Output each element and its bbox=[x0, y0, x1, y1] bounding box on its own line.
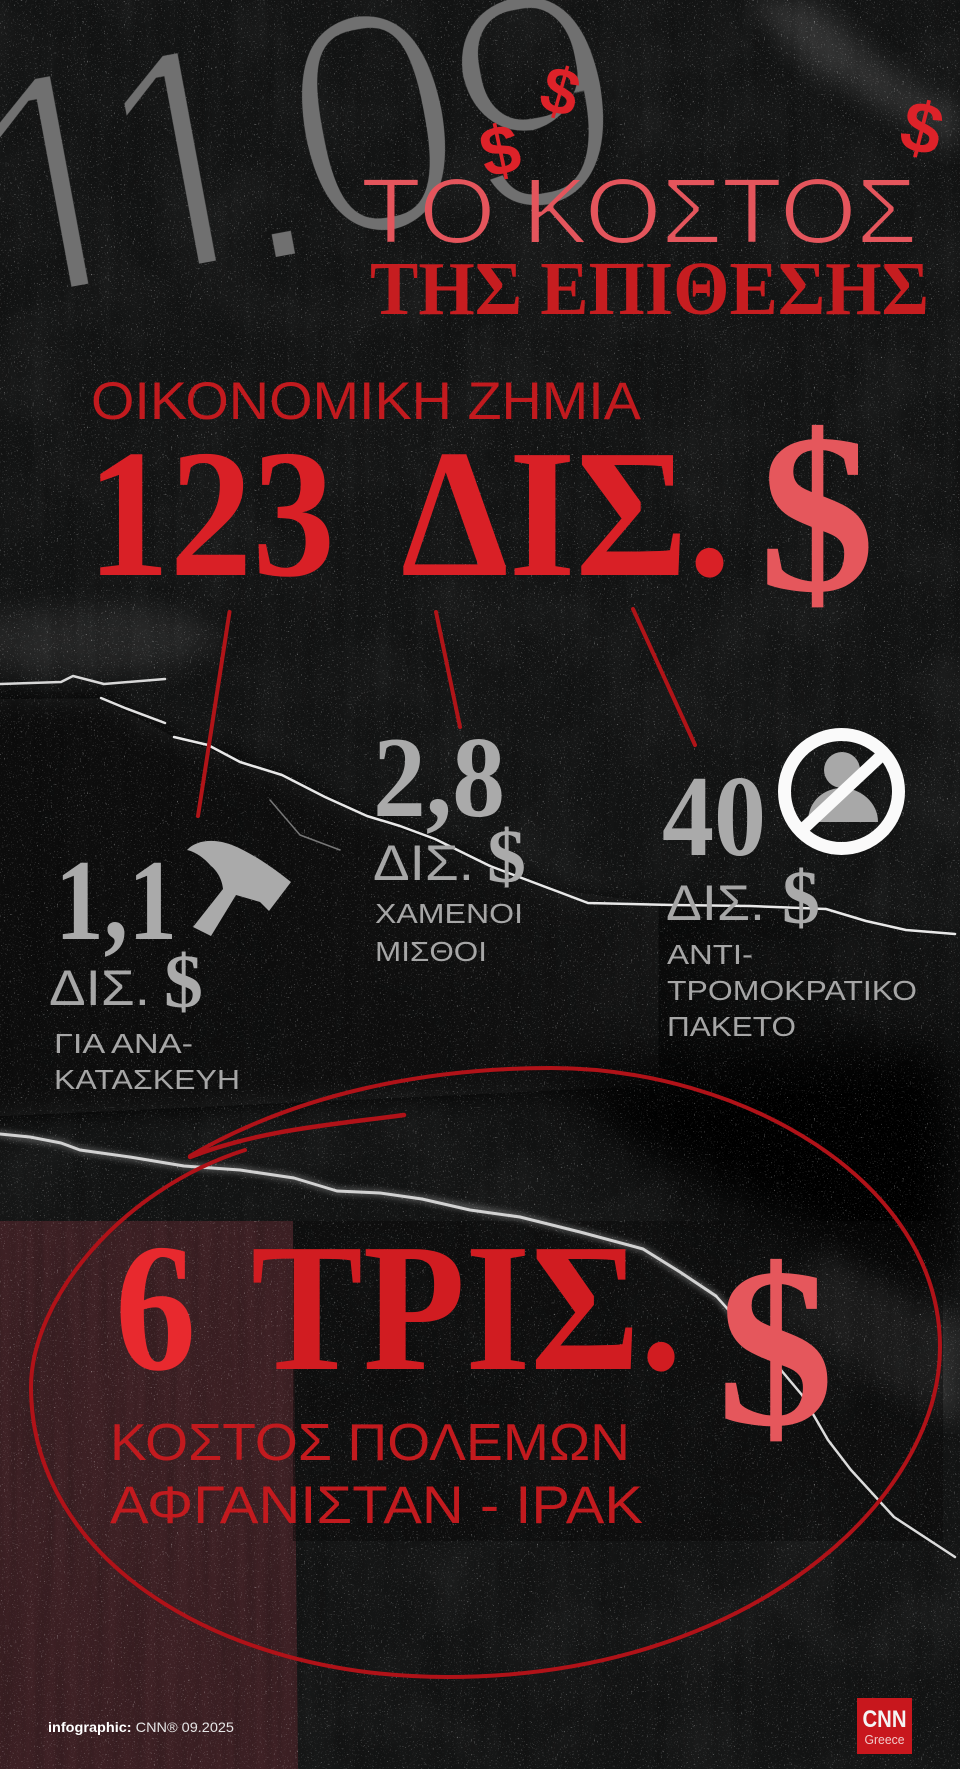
caption: cost of wars bbox=[110, 1414, 643, 1535]
caption: ΤΡΟΜΟΚΡΑΤΙΚΟ bbox=[667, 975, 917, 1006]
icon: big dollar: $ bbox=[717, 1222, 834, 1474]
hand-drawn circle bbox=[31, 1068, 940, 1677]
stat: reconstruction bbox=[49, 837, 291, 1095]
tear: upper crack bbox=[0, 676, 955, 934]
icon: dollar 3: $ bbox=[893, 85, 951, 172]
icon: dollar 1: $ bbox=[532, 50, 588, 132]
icon: dollar 2: $ bbox=[473, 108, 527, 193]
title line 2: ΤΗΣ ΕΠΙΘΕΣΗΣ bbox=[370, 247, 929, 331]
title line 1: ΤΟ ΚΟΣΤΟΣ bbox=[361, 159, 917, 263]
unit: ΔΙΣ. bbox=[373, 835, 474, 891]
panel: maroon block bbox=[0, 1221, 298, 1769]
unit billion: ΔΙΣ. bbox=[401, 412, 731, 615]
caption: cost of wars: ΑΦΓΑΝΙΣΤΑΝ - ΙΡΑΚ bbox=[110, 1476, 643, 1535]
unit dollar: $ bbox=[487, 815, 526, 899]
footer credit: infographic: CNN® 09.2025 bbox=[48, 1719, 234, 1735]
logo: CNN Greece: CNN bbox=[862, 1706, 906, 1733]
caption bbox=[375, 898, 523, 967]
unit dollar: $ bbox=[782, 856, 820, 940]
unit: ΔΙΣ. bbox=[49, 960, 150, 1016]
value: 40 bbox=[662, 753, 766, 880]
connector lines bbox=[198, 609, 695, 816]
stat: lost wages bbox=[373, 714, 526, 967]
value: 2,8 bbox=[373, 714, 505, 841]
icon: big dollar: $ bbox=[759, 388, 875, 640]
figure: 123 billion bbox=[87, 388, 875, 640]
stat: anti-terror package bbox=[662, 734, 917, 1042]
unit: ΔΙΣ. bbox=[666, 875, 765, 931]
unit dollar: $ bbox=[164, 940, 203, 1024]
caption bbox=[667, 939, 917, 1042]
caption: ΑΝΤΙ- bbox=[667, 939, 753, 970]
value: 1,1 bbox=[55, 837, 177, 964]
logo: CNN Greece: Greece bbox=[864, 1733, 905, 1747]
caption: ΜΙΣΘΟΙ bbox=[375, 936, 487, 967]
caption: ΧΑΜΕΝΟΙ bbox=[375, 898, 523, 929]
caption: cost of wars: ΚΟΣΤΟΣ ΠΟΛΕΜΩΝ bbox=[110, 1414, 630, 1472]
value six: 6 bbox=[115, 1206, 196, 1409]
date: 11.09 bbox=[0, 0, 604, 287]
value 123: 123 bbox=[87, 412, 335, 615]
caption: ΚΑΤΑΣΚΕΥΗ bbox=[54, 1064, 240, 1095]
caption: ΠΑΚΕΤΟ bbox=[667, 1011, 796, 1042]
icons: falling dollar signs bbox=[473, 50, 951, 193]
logo: CNN Greece bbox=[857, 1698, 912, 1754]
caption bbox=[54, 1028, 240, 1095]
figure: 6 trillion bbox=[115, 1206, 834, 1474]
tear: lower crack bbox=[0, 1134, 955, 1557]
icon: crossed-out person bbox=[784, 734, 898, 848]
caption: ΓΙΑ ΑΝΑ- bbox=[54, 1028, 193, 1059]
title bbox=[361, 159, 929, 331]
panel: dark block behind war cost bbox=[293, 1221, 943, 1541]
icon: hammer bbox=[187, 841, 291, 936]
unit trillion: ΤΡΙΣ. bbox=[251, 1206, 682, 1409]
heading: economic loss: ΟΙΚΟΝΟΜΙΚΗ ΖΗΜΙΑ bbox=[91, 372, 642, 431]
